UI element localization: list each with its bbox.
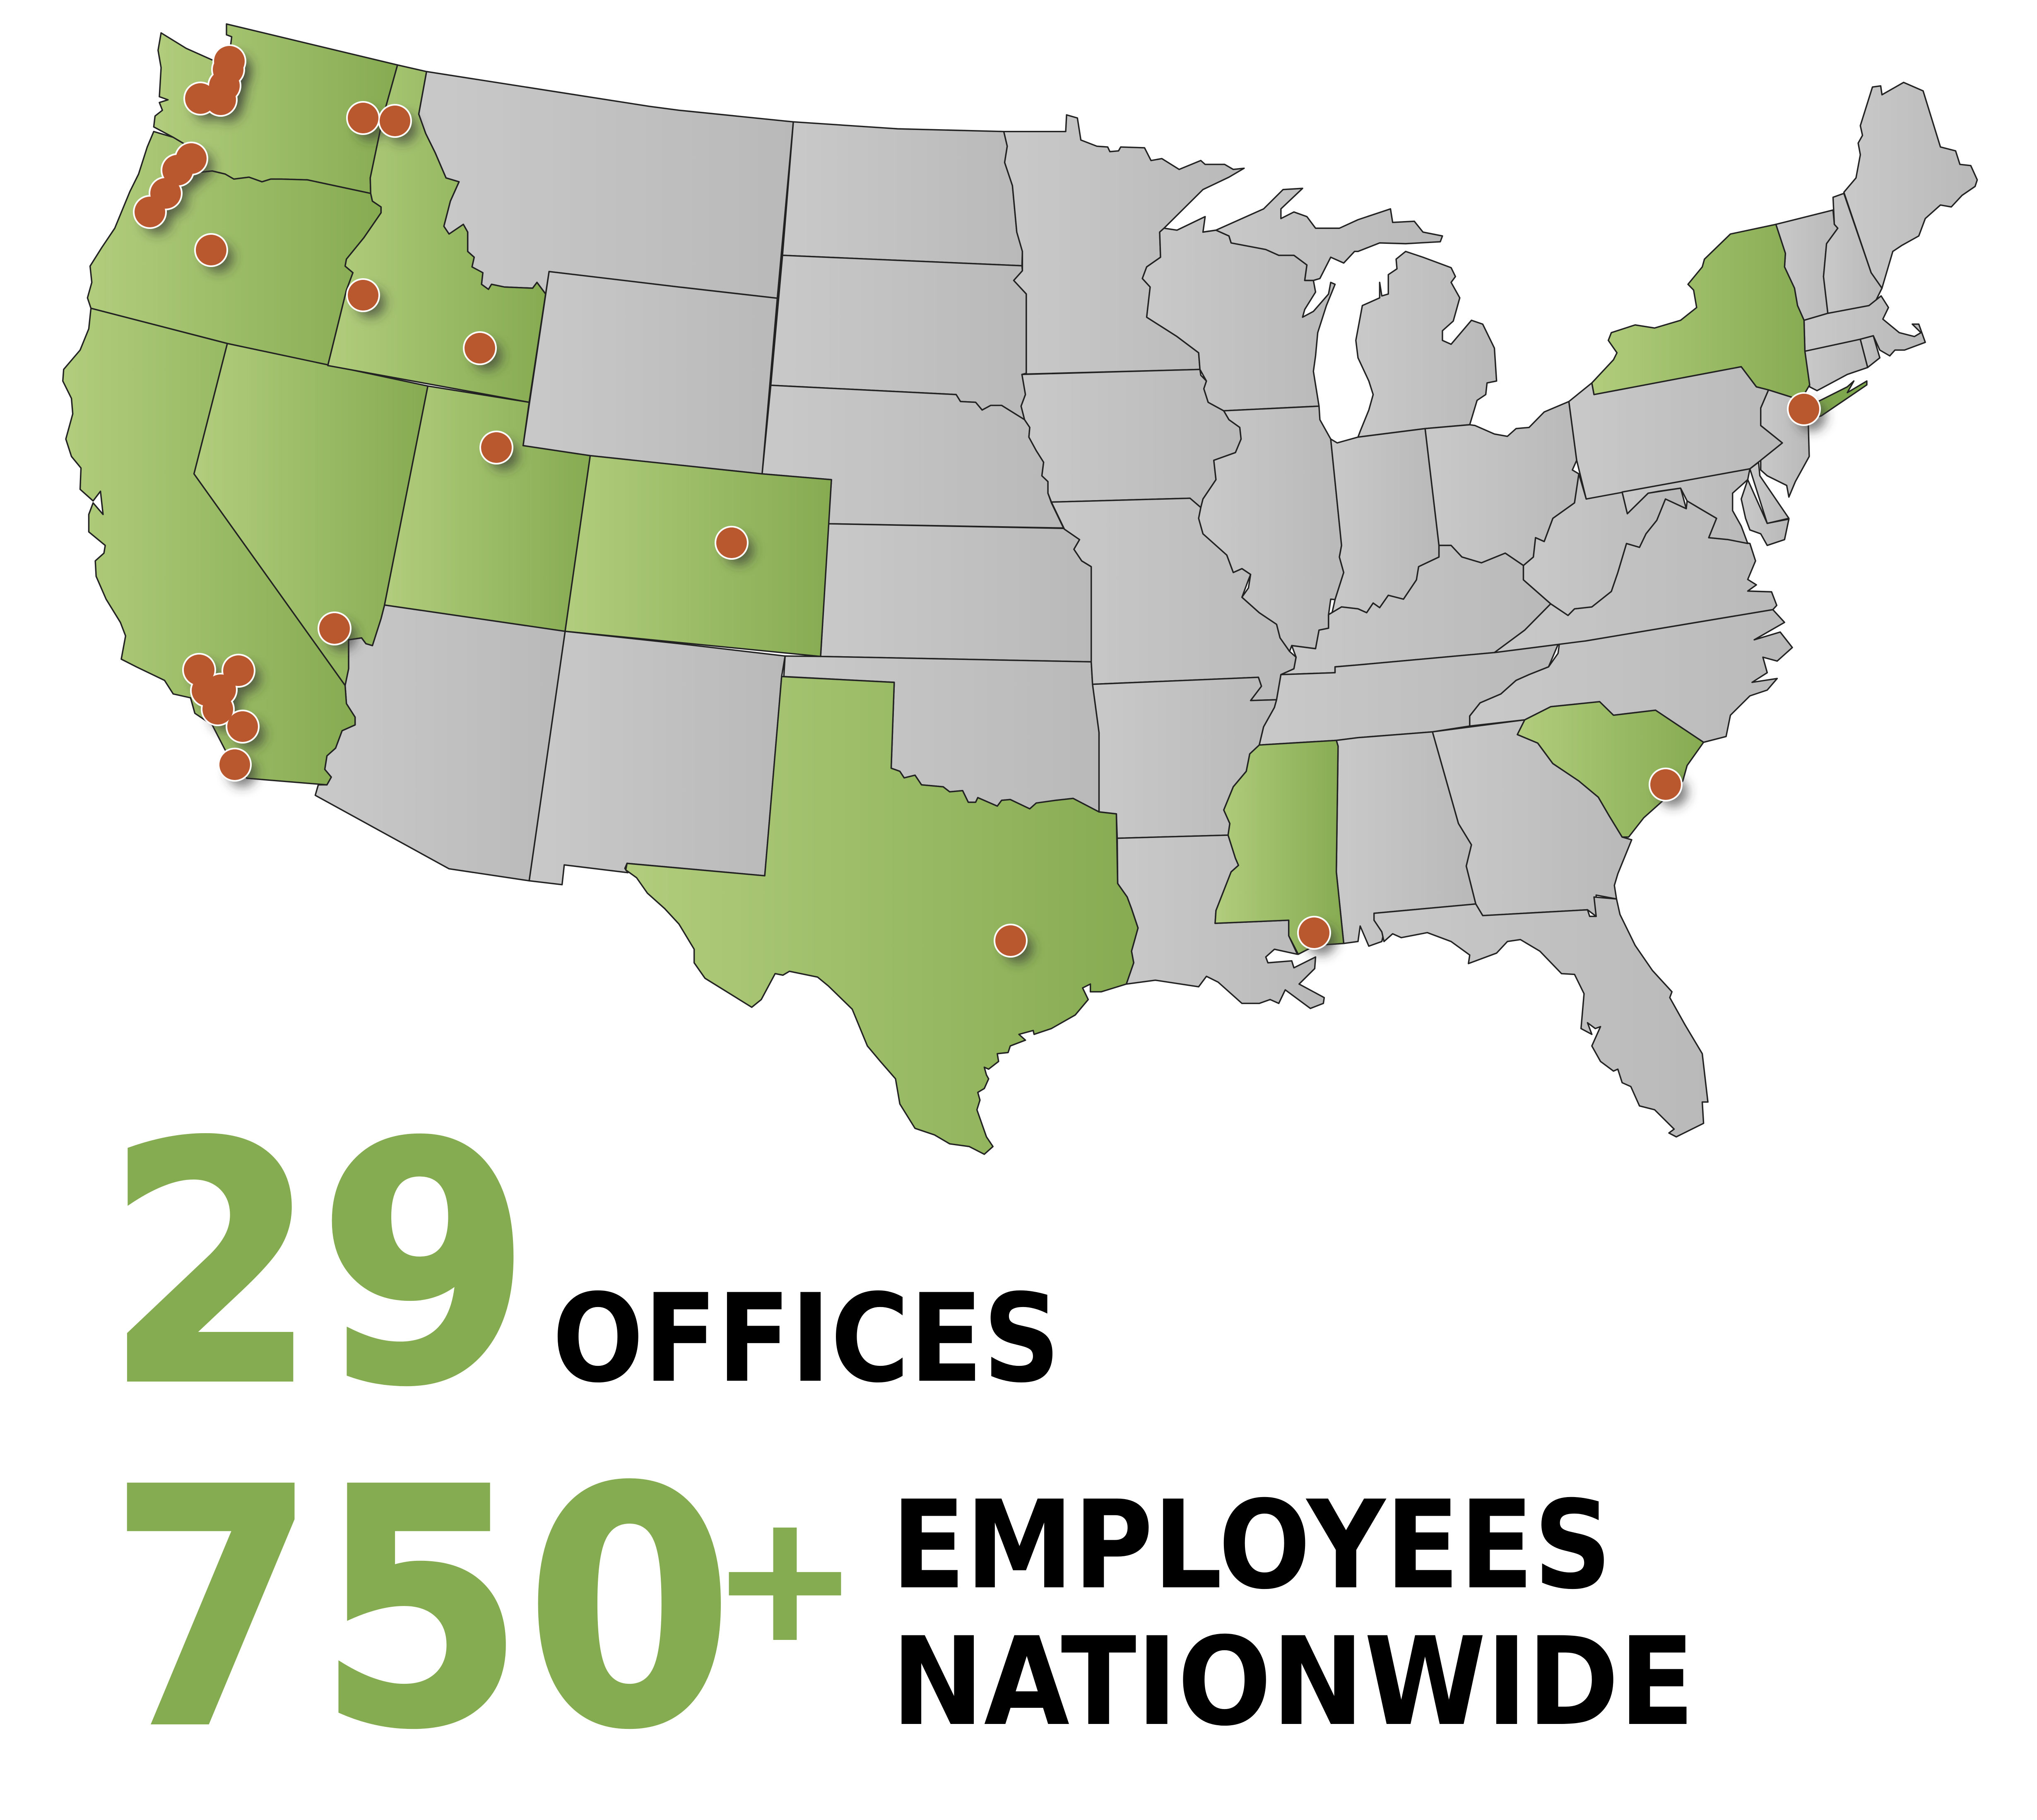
state: Washington	[154, 24, 397, 193]
state: Missouri	[1051, 498, 1296, 701]
marker: San Diego	[219, 749, 250, 780]
marker cluster: Southern California	[184, 655, 258, 742]
state: Kansas	[821, 524, 1091, 662]
marker cluster: Washington, Puget Sound	[185, 46, 245, 115]
non-office states	[315, 72, 1977, 1137]
state: New Hampshire	[1823, 193, 1882, 313]
marker: western Idaho	[348, 280, 378, 311]
state: Minnesota	[1004, 115, 1244, 374]
marker: eastern Idaho	[465, 333, 495, 364]
marker: Utah	[481, 432, 512, 463]
state: South Dakota	[771, 255, 1026, 420]
state: North Carolina	[1470, 609, 1792, 742]
state: California	[63, 308, 355, 785]
stat number: 29: 29	[105, 1074, 531, 1457]
plus sign: +	[712, 1477, 858, 1680]
stat label: NATIONWIDE: NATIONWIDE	[891, 1611, 1695, 1753]
state: Delaware	[1750, 462, 1789, 523]
state: Mississippi	[1215, 740, 1344, 954]
state: Ohio	[1425, 402, 1579, 566]
state: Indiana	[1329, 429, 1439, 628]
state: Arkansas	[1093, 677, 1276, 838]
state: Montana	[419, 72, 793, 298]
marker cluster: Willamette Valley	[135, 143, 207, 227]
marker: central Oregon	[196, 235, 226, 265]
office markers	[135, 46, 1819, 956]
state: Long Island	[1808, 381, 1867, 420]
stat label: OFFICES: OFFICES	[552, 1268, 1060, 1410]
state: Iowa	[1021, 369, 1241, 508]
state: Illinois	[1199, 406, 1344, 651]
state: Nevada	[194, 344, 428, 686]
state: Virginia	[1494, 499, 1777, 652]
marker drop shadows	[142, 54, 1826, 963]
marker pair: Spokane and Coeur d'Alene	[348, 103, 410, 136]
state: Idaho	[328, 65, 546, 402]
state: Nebraska	[762, 385, 1064, 528]
state: Texas	[626, 676, 1138, 1154]
state: Maine	[1844, 82, 1977, 288]
state: Connecticut	[1805, 339, 1868, 391]
state: Vermont	[1776, 210, 1838, 320]
state: Louisiana	[1117, 835, 1324, 1009]
stat label: EMPLOYEES: EMPLOYEES	[891, 1475, 1612, 1616]
state: South Carolina	[1517, 702, 1704, 837]
marker white outlines	[133, 44, 1821, 958]
state: New Mexico	[529, 631, 785, 885]
state: Alabama	[1336, 732, 1476, 946]
state: Maryland	[1622, 469, 1750, 544]
state: Oklahoma	[784, 656, 1099, 812]
state: Massachusetts	[1804, 296, 1925, 356]
marker: Colorado	[716, 527, 747, 558]
marker: Nevada	[319, 613, 350, 644]
state: New Jersey	[1761, 390, 1809, 497]
state: Colorado	[565, 456, 831, 657]
states with offices	[63, 24, 1867, 1154]
state: Georgia	[1433, 720, 1632, 916]
state: Maryland eastern shore	[1741, 480, 1789, 545]
marker: South Carolina	[1650, 769, 1681, 800]
state: Wyoming	[523, 272, 777, 474]
state: West Virginia	[1524, 474, 1686, 615]
state: North Dakota	[783, 122, 1022, 266]
stat number: 750: 750	[108, 1420, 734, 1800]
state: Arizona	[315, 605, 565, 881]
marker: New York	[1789, 394, 1819, 424]
state: Oregon	[87, 132, 381, 366]
state: Utah	[385, 386, 590, 631]
state: Rhode Island	[1860, 336, 1880, 368]
state: Pennsylvania	[1569, 367, 1782, 499]
state: Wisconsin	[1142, 217, 1335, 411]
state: Michigan upper peninsula	[1203, 188, 1442, 280]
state: New York	[1592, 224, 1810, 397]
state: Florida	[1374, 897, 1708, 1137]
state: Tennessee	[1259, 645, 1558, 745]
marker: Mississippi	[1299, 917, 1329, 948]
marker: Texas	[995, 925, 1026, 956]
state: Kentucky	[1281, 545, 1551, 674]
map: United States	[63, 24, 1977, 1154]
state: Michigan lower peninsula	[1356, 251, 1497, 437]
